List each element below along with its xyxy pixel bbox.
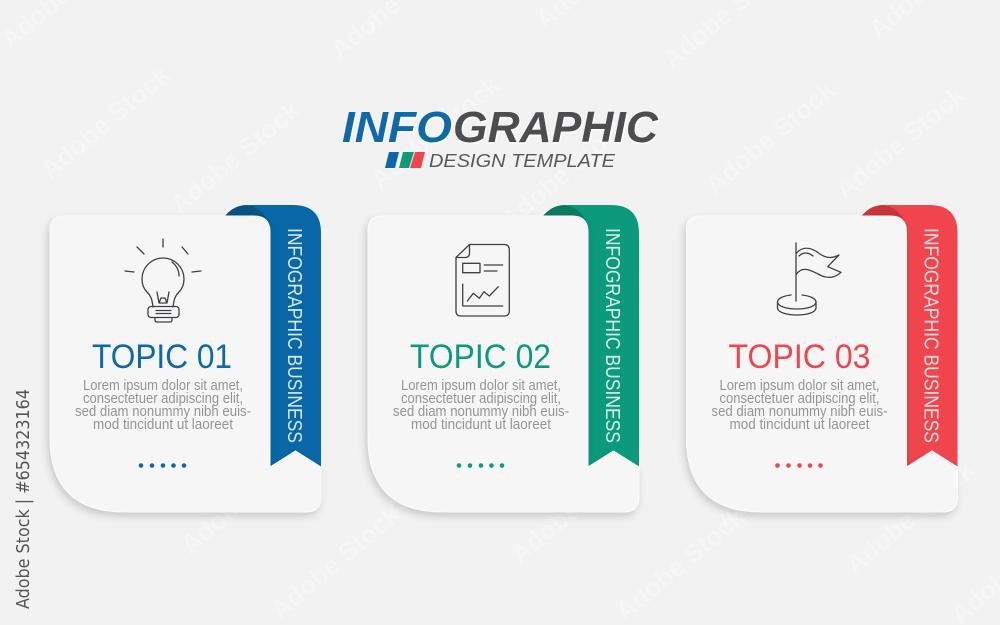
text block: mod tincidunt ut laoreet <box>93 416 234 433</box>
ribbon: green <box>543 205 639 467</box>
pagination dots <box>139 463 186 468</box>
icon: flag on base <box>778 243 841 315</box>
text: Adobe Stock <box>265 499 406 625</box>
text: Adobe Stock <box>610 501 751 625</box>
ribbon label: INFOGRAPHIC BUSINESS <box>601 228 623 443</box>
icon: light bulb <box>125 239 201 322</box>
icon: report document <box>456 244 509 316</box>
text block: Lorem ipsum dolor sit amet, <box>720 377 880 394</box>
heading: TOPIC 03 <box>728 338 870 376</box>
title <box>342 103 659 152</box>
text block: mod tincidunt ut laoreet <box>411 416 552 433</box>
pagination dots <box>457 463 504 468</box>
text block: sed diam nonummy nibh euis- <box>75 403 251 420</box>
text: Adobe Stock <box>175 434 316 560</box>
card background <box>368 216 639 512</box>
ribbon label: INFOGRAPHIC BUSINESS <box>920 228 942 443</box>
text block <box>712 377 888 433</box>
text: Adobe Stock <box>165 94 306 220</box>
subtitle: DESIGN TEMPLATE <box>429 151 616 171</box>
text: Adobe Stock <box>710 409 851 535</box>
text block: Lorem ipsum dolor sit amet, <box>83 377 243 394</box>
text block: consectetuer adipiscing elit, <box>401 390 561 407</box>
heading: TOPIC 01 <box>92 338 232 376</box>
pagination dots <box>775 463 823 468</box>
title: INFO <box>342 103 452 152</box>
heading: TOPIC 02 <box>410 338 551 376</box>
ribbon: red <box>862 205 958 467</box>
text: Adobe Stock <box>495 109 636 235</box>
text: Adobe Stock <box>505 444 646 570</box>
ribbon label: INFOGRAPHIC BUSINESS <box>283 228 305 443</box>
text: Adobe Stock <box>380 399 521 525</box>
text block: consectetuer adipiscing elit, <box>720 390 880 407</box>
panel: topic 02 <box>368 205 639 512</box>
text block: sed diam nonummy nibh euis- <box>393 403 569 420</box>
text block: consectetuer adipiscing elit, <box>83 390 243 407</box>
text: Adobe Stock <box>35 59 176 185</box>
ribbon: blue <box>225 205 321 467</box>
panel: topic 01 <box>50 205 321 512</box>
text block <box>75 377 251 433</box>
text: Adobe Stock <box>830 79 971 205</box>
card background <box>686 216 958 512</box>
title: GRAPHIC <box>453 103 659 152</box>
text block: sed diam nonummy nibh euis- <box>712 403 888 420</box>
text block <box>393 377 569 433</box>
text block: mod tincidunt ut laoreet <box>730 416 870 433</box>
text: Adobe Stock <box>840 454 981 580</box>
text: Adobe Stock <box>700 74 841 200</box>
icon: tricolour stripes <box>385 152 425 168</box>
panel: topic 03 <box>686 205 958 512</box>
card background <box>50 216 321 512</box>
text block: Lorem ipsum dolor sit amet, <box>401 377 561 394</box>
stock id caption: Adobe Stock | #654323164 <box>13 389 34 609</box>
text: Adobe Stock <box>365 69 506 195</box>
